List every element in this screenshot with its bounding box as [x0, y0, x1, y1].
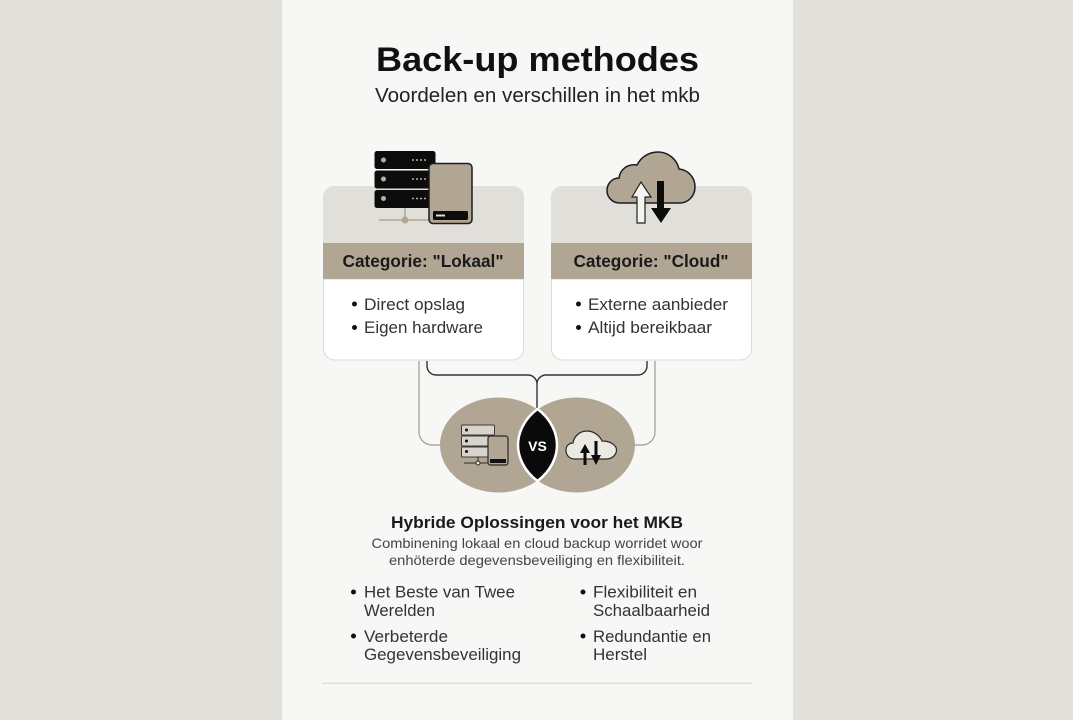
- list: cloud: Externe aanbieder: [588, 296, 729, 314]
- vs badge: [518, 409, 557, 481]
- venn diagram: [440, 398, 635, 492]
- heading: lokaal: Categorie: "Lokaal": [342, 251, 504, 271]
- title: Back-up methodes: [376, 41, 699, 79]
- list: cloud: [576, 296, 729, 337]
- icon: small server: [462, 425, 508, 465]
- list: right benefits: Schaalbaarheid: [593, 602, 710, 620]
- list: right benefits: Herstel: [593, 646, 647, 664]
- text block: description: Combinening lokaal en cloud backup worridet woor: [372, 535, 703, 551]
- list: left benefits: Het Beste van Twee: [364, 584, 515, 602]
- list: lokaal: Eigen hardware: [364, 319, 483, 337]
- list: left benefits: Werelden: [364, 602, 435, 620]
- panel: cloud: [551, 186, 752, 360]
- subtitle: Voordelen en verschillen in het mkb: [375, 85, 700, 107]
- list: left benefits: Gegevensbeveiliging: [364, 646, 521, 664]
- icon: server and drive: [374, 151, 472, 224]
- panel: main page: [282, 0, 793, 720]
- list: right benefits: Flexibiliteit en: [593, 584, 697, 602]
- icon: cloud with arrows: [607, 152, 695, 223]
- vs badge: VS: [528, 438, 547, 454]
- text block: description: enhöterde degevensbeveiliging en flexibiliteit.: [389, 552, 685, 568]
- list: cloud: Altijd bereikbaar: [588, 319, 713, 337]
- heading: cloud: Categorie: "Cloud": [574, 251, 728, 271]
- connectors: [419, 361, 655, 445]
- list: right benefits: Redundantie en: [593, 628, 711, 646]
- text block: description: [372, 535, 703, 568]
- panel: lokaal: [323, 186, 524, 360]
- list: left benefits: Verbeterde: [364, 628, 448, 646]
- icon: small cloud: [566, 431, 616, 465]
- list: lokaal: Direct opslag: [364, 296, 465, 314]
- heading: hybride: Hybride Oplossingen voor het MKB: [391, 514, 683, 532]
- list: left benefits: [351, 584, 521, 664]
- list: right benefits: [580, 584, 711, 664]
- list: lokaal: [352, 296, 483, 337]
